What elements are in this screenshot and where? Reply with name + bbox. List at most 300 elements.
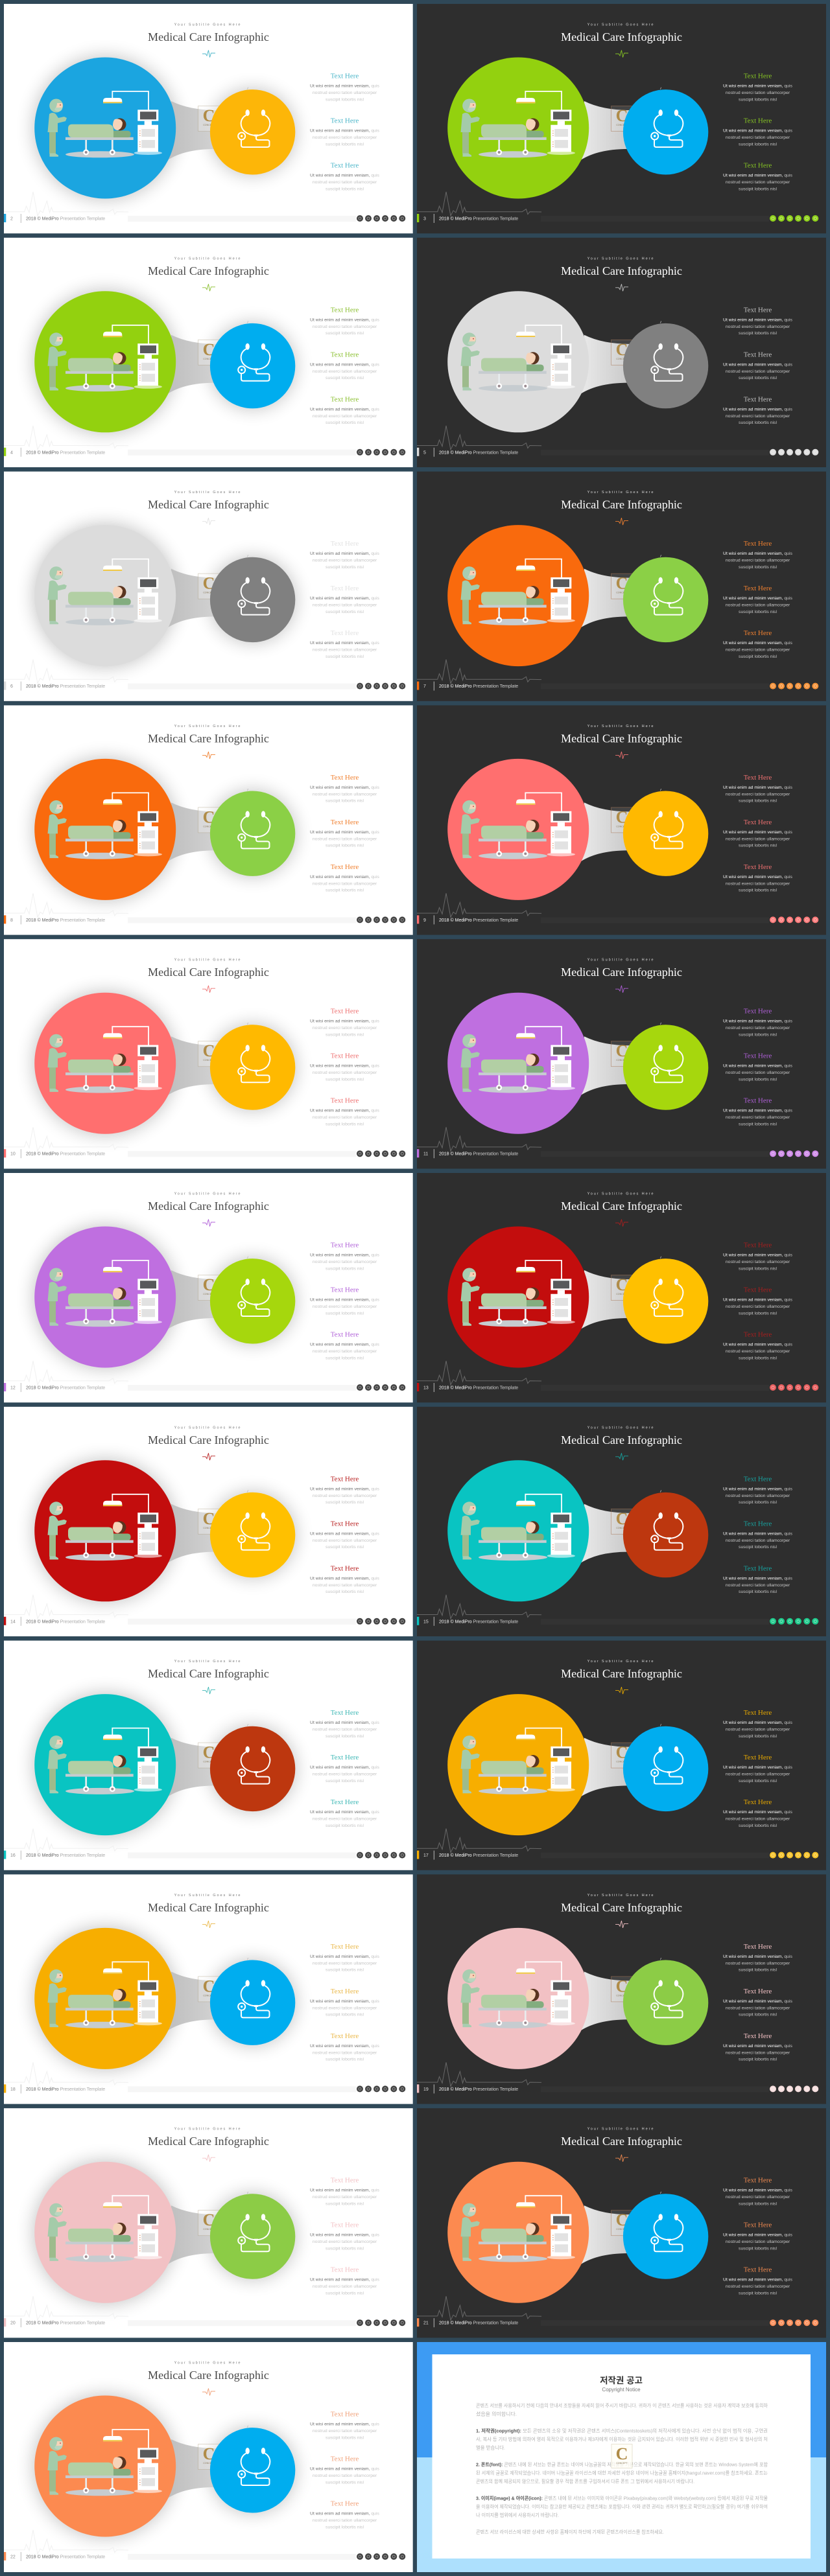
title: Medical Care Infographic — [148, 1901, 269, 1914]
icon: heartbeat — [615, 986, 628, 993]
footer: 2018 © MediPro Presentation Template — [439, 450, 518, 455]
text block 2: Text Here — [331, 117, 359, 124]
text block 1: Ut wisi enim ad minim veniam, quis — [723, 84, 793, 88]
text block 3: nostrud exerci tation ullamcorper — [726, 180, 790, 185]
text block 3: nostrud exerci tation ullamcorper — [313, 2518, 377, 2523]
text block 1: suscipit lobortis nisl — [739, 565, 777, 570]
icon: heartbeat — [202, 1220, 215, 1226]
title: Medical Care Infographic — [148, 2135, 269, 2148]
footer: 2 — [10, 216, 13, 222]
footer: 2018 © MediPro Presentation Template — [26, 1152, 105, 1157]
text block 1: suscipit lobortis nisl — [739, 1968, 777, 1973]
text block 2: Ut wisi enim ad minim veniam, quis — [723, 1064, 793, 1069]
text block 3: nostrud exerci tation ullamcorper — [726, 2050, 790, 2055]
text block 3: suscipit lobortis nisl — [326, 1122, 364, 1126]
circle shadows — [34, 290, 296, 433]
text block 2: Ut wisi enim ad minim veniam, quis — [310, 830, 380, 835]
text block 2: Text Here — [744, 1988, 772, 1995]
text block 3: Text Here — [331, 1097, 359, 1105]
footer: 4 — [10, 450, 13, 455]
text block 2 — [723, 585, 793, 614]
text block 3: suscipit lobortis nisl — [739, 421, 777, 425]
text block 1: Ut wisi enim ad minim veniam, quis — [310, 1019, 380, 1024]
text block 3 — [310, 1798, 380, 1828]
text block 1: nostrud exerci tation ullamcorper — [313, 2429, 377, 2433]
icon: heartbeat — [615, 1453, 628, 1460]
text block 2: Text Here — [331, 1988, 359, 1995]
text block 3: Text Here — [744, 1097, 772, 1105]
title: Medical Care Infographic — [561, 498, 682, 511]
white notice card — [432, 2354, 811, 2559]
text block 2: Ut wisi enim ad minim veniam, quis — [310, 596, 380, 601]
text block 3: nostrud exerci tation ullamcorper — [313, 414, 377, 419]
text block 1: suscipit lobortis nisl — [739, 1500, 777, 1505]
text block 3 — [310, 162, 380, 191]
connector — [165, 802, 221, 863]
text block 2: nostrud exerci tation ullamcorper — [313, 1538, 377, 1543]
panel: slide 3 green dark — [417, 4, 826, 233]
text block 3: Text Here — [744, 395, 772, 403]
text block 3: nostrud exerci tation ullamcorper — [726, 1583, 790, 1588]
text block 1: suscipit lobortis nisl — [326, 331, 364, 336]
connector — [165, 569, 221, 630]
footer: 17 — [423, 1853, 429, 1858]
text block 1: suscipit lobortis nisl — [326, 1968, 364, 1973]
text block 2: Text Here — [744, 1520, 772, 1527]
text block 2 — [723, 1052, 793, 1082]
slide background — [417, 1407, 826, 1636]
panel: slide 22 salmon light — [4, 2342, 413, 2572]
logo watermark: C — [203, 1275, 215, 1294]
text block 2: nostrud exerci tation ullamcorper — [313, 2240, 377, 2244]
logo watermark: C — [616, 1275, 628, 1294]
text block 3: Ut wisi enim ad minim veniam, quis — [723, 875, 793, 879]
text block 2: Ut wisi enim ad minim veniam, quis — [310, 1297, 380, 1303]
icon: heartbeat — [202, 518, 215, 525]
text block 2: Ut wisi enim ad minim veniam, quis — [310, 2466, 380, 2472]
text block 3: Ut wisi enim ad minim veniam, quis — [723, 1810, 793, 1815]
text block 3: Text Here — [744, 162, 772, 170]
text block 3 — [310, 1097, 380, 1126]
slide background — [417, 472, 826, 701]
logo watermark — [611, 1743, 632, 1768]
logo watermark: C — [203, 1977, 215, 1995]
panel: slide 13 red dark — [417, 1173, 826, 1402]
title: Medical Care Infographic — [561, 1667, 682, 1680]
subtitle: Your Subtitle Goes Here — [587, 257, 654, 261]
text block 3: Text Here — [744, 1798, 772, 1806]
text block 2 — [310, 1988, 380, 2017]
logo watermark: CONCEPT — [616, 1293, 628, 1295]
subtitle: Your Subtitle Goes Here — [174, 2361, 241, 2365]
small circle with stethoscope icon — [210, 789, 295, 876]
text block 2: nostrud exerci tation ullamcorper — [726, 1772, 790, 1777]
text block 2 — [310, 2455, 380, 2485]
logo watermark: CONCEPT — [203, 1059, 215, 1062]
text block 3: nostrud exerci tation ullamcorper — [313, 2050, 377, 2055]
text block 2: nostrud exerci tation ullamcorper — [726, 2240, 790, 2244]
large circle with patient illustration — [447, 1694, 589, 1835]
intro paragraph — [476, 2402, 768, 2417]
footer: 19 — [423, 2087, 429, 2092]
text block 2: Text Here — [331, 1754, 359, 1761]
large circle with patient illustration — [447, 1928, 589, 2069]
text block 2: Text Here — [744, 117, 772, 124]
small circle with stethoscope icon — [623, 1724, 708, 1811]
logo watermark — [198, 574, 219, 599]
text block 2 — [310, 818, 380, 848]
text block 1: Ut wisi enim ad minim veniam, quis — [723, 318, 793, 322]
connector — [165, 1270, 221, 1331]
footer: 2018 © MediPro Presentation Template — [439, 216, 518, 222]
text block 1 — [310, 2411, 380, 2440]
small circle with stethoscope icon — [623, 1257, 708, 1344]
panel: slide 16 teal light — [4, 1641, 413, 1870]
title: Medical Care Infographic — [561, 1200, 682, 1213]
text block 3: Text Here — [331, 629, 359, 637]
text block 3: nostrud exerci tation ullamcorper — [313, 2284, 377, 2289]
subtitle: Your Subtitle Goes Here — [174, 257, 241, 261]
small circle with stethoscope icon — [210, 1491, 295, 1577]
text block 2: suscipit lobortis nisl — [326, 1077, 364, 1082]
text block 2: Ut wisi enim ad minim veniam, quis — [310, 1064, 380, 1069]
text block 1: nostrud exerci tation ullamcorper — [313, 325, 377, 329]
footer — [4, 893, 405, 924]
text block 2 — [723, 1286, 793, 1316]
icon: heartbeat — [615, 518, 628, 525]
connector — [165, 2439, 221, 2500]
slide background — [417, 1874, 826, 2104]
text block 2: nostrud exerci tation ullamcorper — [313, 1772, 377, 1777]
logo watermark — [611, 1509, 632, 1534]
subtitle: Your Subtitle Goes Here — [174, 1426, 241, 1430]
text block 1: Ut wisi enim ad minim veniam, quis — [723, 1019, 793, 1024]
large circle with patient illustration — [34, 1694, 176, 1835]
text block 1: Ut wisi enim ad minim veniam, quis — [310, 1955, 380, 1959]
footer — [417, 1361, 818, 1392]
text block 3: Text Here — [331, 2032, 359, 2040]
text block 2 — [723, 2222, 793, 2251]
footer: 10 — [10, 1152, 16, 1157]
text block 3: Text Here — [331, 1798, 359, 1806]
footer — [4, 192, 405, 223]
text block 3 — [310, 2266, 380, 2295]
text block 1: Text Here — [744, 540, 772, 548]
connector — [578, 802, 634, 863]
text block 3 — [723, 1564, 793, 1594]
subtitle: Your Subtitle Goes Here — [587, 725, 654, 728]
text block 3: Text Here — [331, 863, 359, 871]
subtitle: Your Subtitle Goes Here — [587, 1894, 654, 1897]
logo watermark: CONCEPT — [203, 1994, 215, 1997]
circle shadows — [34, 2395, 296, 2538]
panel: slide 20 pink light — [4, 2108, 413, 2338]
text block 2: nostrud exerci tation ullamcorper — [313, 1305, 377, 1309]
logo watermark: CONCEPT — [203, 825, 215, 828]
text block 3: Ut wisi enim ad minim veniam, quis — [310, 1810, 380, 1815]
subtitle: Your Subtitle Goes Here — [587, 2128, 654, 2131]
text block 1: nostrud exerci tation ullamcorper — [726, 2195, 790, 2199]
text block 2: suscipit lobortis nisl — [739, 2013, 777, 2017]
panel: slide 12 purple light — [4, 1173, 413, 1402]
footer — [417, 192, 818, 223]
subtitle: Your Subtitle Goes Here — [587, 1660, 654, 1664]
footer: 16 — [10, 1853, 16, 1858]
small circle with stethoscope icon — [623, 2192, 708, 2279]
small circle with stethoscope icon — [623, 555, 708, 642]
connector — [578, 1504, 634, 1565]
text block 3: Text Here — [331, 395, 359, 403]
footer: 2018 © MediPro Presentation Template — [439, 1152, 518, 1157]
paragraph 1: copyright — [476, 2428, 768, 2451]
icon: heartbeat — [615, 2155, 628, 2162]
text block 3: suscipit lobortis nisl — [739, 2058, 777, 2062]
logo watermark: C — [616, 1743, 628, 1762]
text block 1: suscipit lobortis nisl — [739, 799, 777, 804]
small circle with stethoscope icon — [623, 321, 708, 408]
connector — [578, 569, 634, 630]
text block 1: nostrud exerci tation ullamcorper — [313, 1260, 377, 1264]
text block 1: suscipit lobortis nisl — [739, 2201, 777, 2206]
logo watermark: CONCEPT — [203, 1761, 215, 1763]
footer: 2018 © MediPro Presentation Template — [26, 2321, 105, 2326]
text block 2: nostrud exerci tation ullamcorper — [313, 837, 377, 841]
text block 3: Ut wisi enim ad minim veniam, quis — [723, 2044, 793, 2048]
text block 2: Ut wisi enim ad minim veniam, quis — [310, 362, 380, 367]
text block 2: nostrud exerci tation ullamcorper — [313, 2006, 377, 2010]
text block 3 — [723, 162, 793, 191]
footer — [417, 1595, 818, 1626]
text block 1: Ut wisi enim ad minim veniam, quis — [723, 1955, 793, 1959]
slide background — [417, 939, 826, 1168]
text block 2: nostrud exerci tation ullamcorper — [313, 369, 377, 374]
circle shadows — [34, 57, 296, 200]
text block 2: suscipit lobortis nisl — [326, 142, 364, 146]
text block 2: nostrud exerci tation ullamcorper — [726, 837, 790, 841]
logo watermark: C — [203, 1743, 215, 1762]
title: Medical Care Infographic — [148, 732, 269, 745]
text block 2: nostrud exerci tation ullamcorper — [313, 1071, 377, 1075]
text block 2: Ut wisi enim ad minim veniam, quis — [723, 2233, 793, 2238]
logo watermark — [611, 574, 632, 599]
panel: slide 10 coral light — [4, 939, 413, 1168]
panel: slide 2 blue light — [4, 4, 413, 233]
connector — [578, 1036, 634, 1097]
logo watermark: C — [203, 2444, 215, 2463]
text block 2: Text Here — [744, 818, 772, 826]
circle shadows — [34, 2161, 296, 2304]
text block 2 — [723, 818, 793, 848]
heading: English: Copyright Notice — [602, 2387, 641, 2393]
small circle with stethoscope icon — [210, 1023, 295, 1110]
paragraph 3: image and icon: 나 이미지를 범위에서 사용하시기 바랍니다. — [476, 2512, 559, 2518]
text block 1: suscipit lobortis nisl — [739, 331, 777, 336]
logo watermark: C — [616, 1977, 628, 1995]
title: Medical Care Infographic — [148, 966, 269, 979]
text block 1: Ut wisi enim ad minim veniam, quis — [310, 318, 380, 322]
text block 2 — [310, 1754, 380, 1783]
text block 1 — [310, 1709, 380, 1739]
text block 2 — [310, 1286, 380, 1316]
text block 1: nostrud exerci tation ullamcorper — [313, 1494, 377, 1498]
small circle with stethoscope icon — [210, 1958, 295, 2045]
text block 3: suscipit lobortis nisl — [326, 1824, 364, 1828]
text block 3: suscipit lobortis nisl — [326, 2058, 364, 2062]
text block 3: nostrud exerci tation ullamcorper — [313, 648, 377, 653]
logo watermark: C — [203, 1041, 215, 1060]
logo watermark — [198, 106, 219, 131]
text block 1: suscipit lobortis nisl — [326, 97, 364, 102]
text block 2: Ut wisi enim ad minim veniam, quis — [723, 596, 793, 601]
text block 1: Text Here — [744, 774, 772, 782]
subtitle: Your Subtitle Goes Here — [174, 2128, 241, 2131]
logo watermark: CONCEPT — [203, 1527, 215, 1529]
text block 1: nostrud exerci tation ullamcorper — [313, 1026, 377, 1030]
text block 3: suscipit lobortis nisl — [326, 1356, 364, 1360]
text block 3: Text Here — [744, 2032, 772, 2040]
text block 3: suscipit lobortis nisl — [326, 2291, 364, 2295]
logo watermark — [198, 2444, 219, 2469]
text block 1: nostrud exerci tation ullamcorper — [726, 1494, 790, 1498]
text block 1 — [723, 1475, 793, 1505]
text block 3: Text Here — [744, 863, 772, 871]
background bottom band — [417, 2457, 826, 2572]
logo watermark — [198, 1275, 219, 1300]
text block 3: suscipit lobortis nisl — [739, 655, 777, 659]
text block 2: Ut wisi enim ad minim veniam, quis — [723, 362, 793, 367]
logo watermark: C — [203, 106, 215, 125]
text block 2: Ut wisi enim ad minim veniam, quis — [310, 1531, 380, 1536]
text block 1: nostrud exerci tation ullamcorper — [726, 91, 790, 95]
text block 1 — [723, 774, 793, 804]
footer: 2018 © MediPro Presentation Template — [26, 1853, 105, 1858]
large circle with patient illustration — [34, 525, 176, 666]
text block 3: suscipit lobortis nisl — [326, 421, 364, 425]
subtitle: Your Subtitle Goes Here — [174, 1192, 241, 1196]
subtitle: Your Subtitle Goes Here — [174, 958, 241, 962]
logo watermark: C — [616, 1041, 628, 1060]
panel: copyright notice — [417, 2342, 826, 2572]
large circle with patient illustration — [447, 1226, 589, 1367]
text block 1: nostrud exerci tation ullamcorper — [726, 325, 790, 329]
text block 1: Ut wisi enim ad minim veniam, quis — [723, 785, 793, 790]
text block 3 — [310, 1564, 380, 1594]
text block 3: nostrud exerci tation ullamcorper — [313, 180, 377, 185]
text block 2: Text Here — [331, 2455, 359, 2463]
icon: heartbeat — [615, 284, 628, 291]
footer: 2018 © MediPro Presentation Template — [439, 1386, 518, 1391]
text block 3 — [723, 2032, 793, 2062]
panel: slide 8 orange light — [4, 705, 413, 935]
title: Medical Care Infographic — [148, 498, 269, 511]
footer — [4, 1829, 405, 1860]
text block 3: nostrud exerci tation ullamcorper — [726, 881, 790, 886]
subtitle: Your Subtitle Goes Here — [587, 1192, 654, 1196]
text block 3: suscipit lobortis nisl — [326, 2525, 364, 2529]
text block 2 — [310, 1052, 380, 1082]
text block 3 — [310, 395, 380, 425]
slide background — [4, 1641, 413, 1870]
text block 3: Ut wisi enim ad minim veniam, quis — [310, 407, 380, 412]
text block 1: Ut wisi enim ad minim veniam, quis — [310, 2422, 380, 2426]
text block 2: suscipit lobortis nisl — [326, 610, 364, 614]
closing paragraph: 콘텐츠 서브 라이선스에 대한 상세한 사항은 홈페이지 하단에 기재된 콘텐츠라이선스를 참조하세요. — [476, 2529, 664, 2535]
logo watermark — [198, 1509, 219, 1534]
text block 1: nostrud exerci tation ullamcorper — [726, 792, 790, 796]
panel: slide 21 salmon dark — [417, 2108, 826, 2338]
text block 3 — [723, 1798, 793, 1828]
text block 3: Text Here — [744, 1331, 772, 1339]
text block 2: nostrud exerci tation ullamcorper — [726, 1538, 790, 1543]
large circle with patient illustration — [447, 57, 589, 198]
text block 1: Ut wisi enim ad minim veniam, quis — [723, 2188, 793, 2193]
text block 1: nostrud exerci tation ullamcorper — [726, 1961, 790, 1966]
connector — [165, 1738, 221, 1799]
footer: 5 — [423, 450, 426, 455]
paragraph 1: copyright: 1. 저작권(copyright): 모든 콘텐츠의 소유 및 저작권은 콘텐츠 서비스(Contentstoskets)의 저작사에게 있습니다. 사전 승낙 없이 법적 이용, 구연권 — [476, 2428, 768, 2434]
text block 1 — [723, 1709, 793, 1739]
slide background — [4, 4, 413, 233]
text block 2: suscipit lobortis nisl — [739, 1077, 777, 1082]
logo watermark: CONCEPT — [616, 124, 628, 126]
text block 2: Text Here — [331, 351, 359, 358]
text block 2: suscipit lobortis nisl — [326, 844, 364, 848]
text block 1: suscipit lobortis nisl — [739, 1032, 777, 1037]
text block 1: Text Here — [331, 540, 359, 548]
panel: slide 11 purple dark — [417, 939, 826, 1168]
paragraph 1: copyright: 벌을 받습니다. — [476, 2444, 505, 2451]
footer: 3 — [423, 216, 426, 222]
logo watermark — [611, 2444, 632, 2468]
text block 3: nostrud exerci tation ullamcorper — [313, 1583, 377, 1588]
icon: heartbeat — [615, 1220, 628, 1226]
footer: 2018 © MediPro Presentation Template — [26, 684, 105, 689]
logo watermark: CONCEPT — [616, 1059, 628, 1062]
text block 2: nostrud exerci tation ullamcorper — [313, 135, 377, 140]
text block 1: nostrud exerci tation ullamcorper — [726, 1026, 790, 1030]
text block 3: Ut wisi enim ad minim veniam, quis — [310, 1109, 380, 1113]
large circle with patient illustration — [34, 57, 176, 198]
logo watermark: C — [203, 340, 215, 359]
text block 3: suscipit lobortis nisl — [326, 655, 364, 659]
title: Medical Care Infographic — [561, 1433, 682, 1446]
slide background — [4, 1407, 413, 1636]
text block 1 — [310, 1943, 380, 1973]
intro paragraph: 콘텐츠 서브를 사용하시기 전에 다음의 안내서 조항들을 자세히 읽어 주시기 바랍니다. 귀하가 이 콘텐츠 서브를 사용하는 것은 사용자 계약과 보호에 동의하 — [476, 2402, 768, 2409]
text block 2: suscipit lobortis nisl — [739, 844, 777, 848]
text block 1 — [723, 1008, 793, 1037]
small circle with stethoscope icon — [210, 1257, 295, 1344]
paragraph 2: font: 콘텐츠의 함께 제공되지 않으므로, 필요할 경우 적합 폰트를 구입하셔서 다른 폰트 그 범위에서 사용하시기 바랍니다. — [476, 2477, 694, 2484]
icon: heartbeat — [202, 1687, 215, 1694]
text block 1: suscipit lobortis nisl — [326, 565, 364, 570]
paragraph 3: image and icon: 3. 이미지(image) & 아이콘(icon): 콘텐츠 내에 된 서브는 이미지와 아이콘은 Pixabay(pixabay.com)와 Websty(websty.com) 등에서 제공된 무료 저작물 — [476, 2494, 768, 2501]
small circle with stethoscope icon — [623, 87, 708, 175]
panel: slide 19 pink dark — [417, 1874, 826, 2104]
text block 3: Text Here — [744, 2266, 772, 2274]
paragraph 3: image and icon: 을 이용하여 제작되었습니다. 이미지는 참고용만 제공되고 콘텐츠에는 포함됩니다. 이와 관련 권리는 귀하가 별도로 확인하고(필요할 경우) 여기를 쉬우하여 — [476, 2503, 768, 2510]
connector — [578, 335, 634, 396]
text block 1: Text Here — [331, 1475, 359, 1483]
text block 1: Text Here — [744, 1242, 772, 1249]
footer — [4, 1595, 405, 1626]
logo watermark: C — [616, 2444, 628, 2463]
small circle with stethoscope icon — [210, 2426, 295, 2513]
text block 1: suscipit lobortis nisl — [739, 1734, 777, 1739]
logo watermark: CONCEPT — [616, 1527, 628, 1529]
text block 2: Ut wisi enim ad minim veniam, quis — [723, 1297, 793, 1303]
large circle with patient illustration — [447, 291, 589, 432]
